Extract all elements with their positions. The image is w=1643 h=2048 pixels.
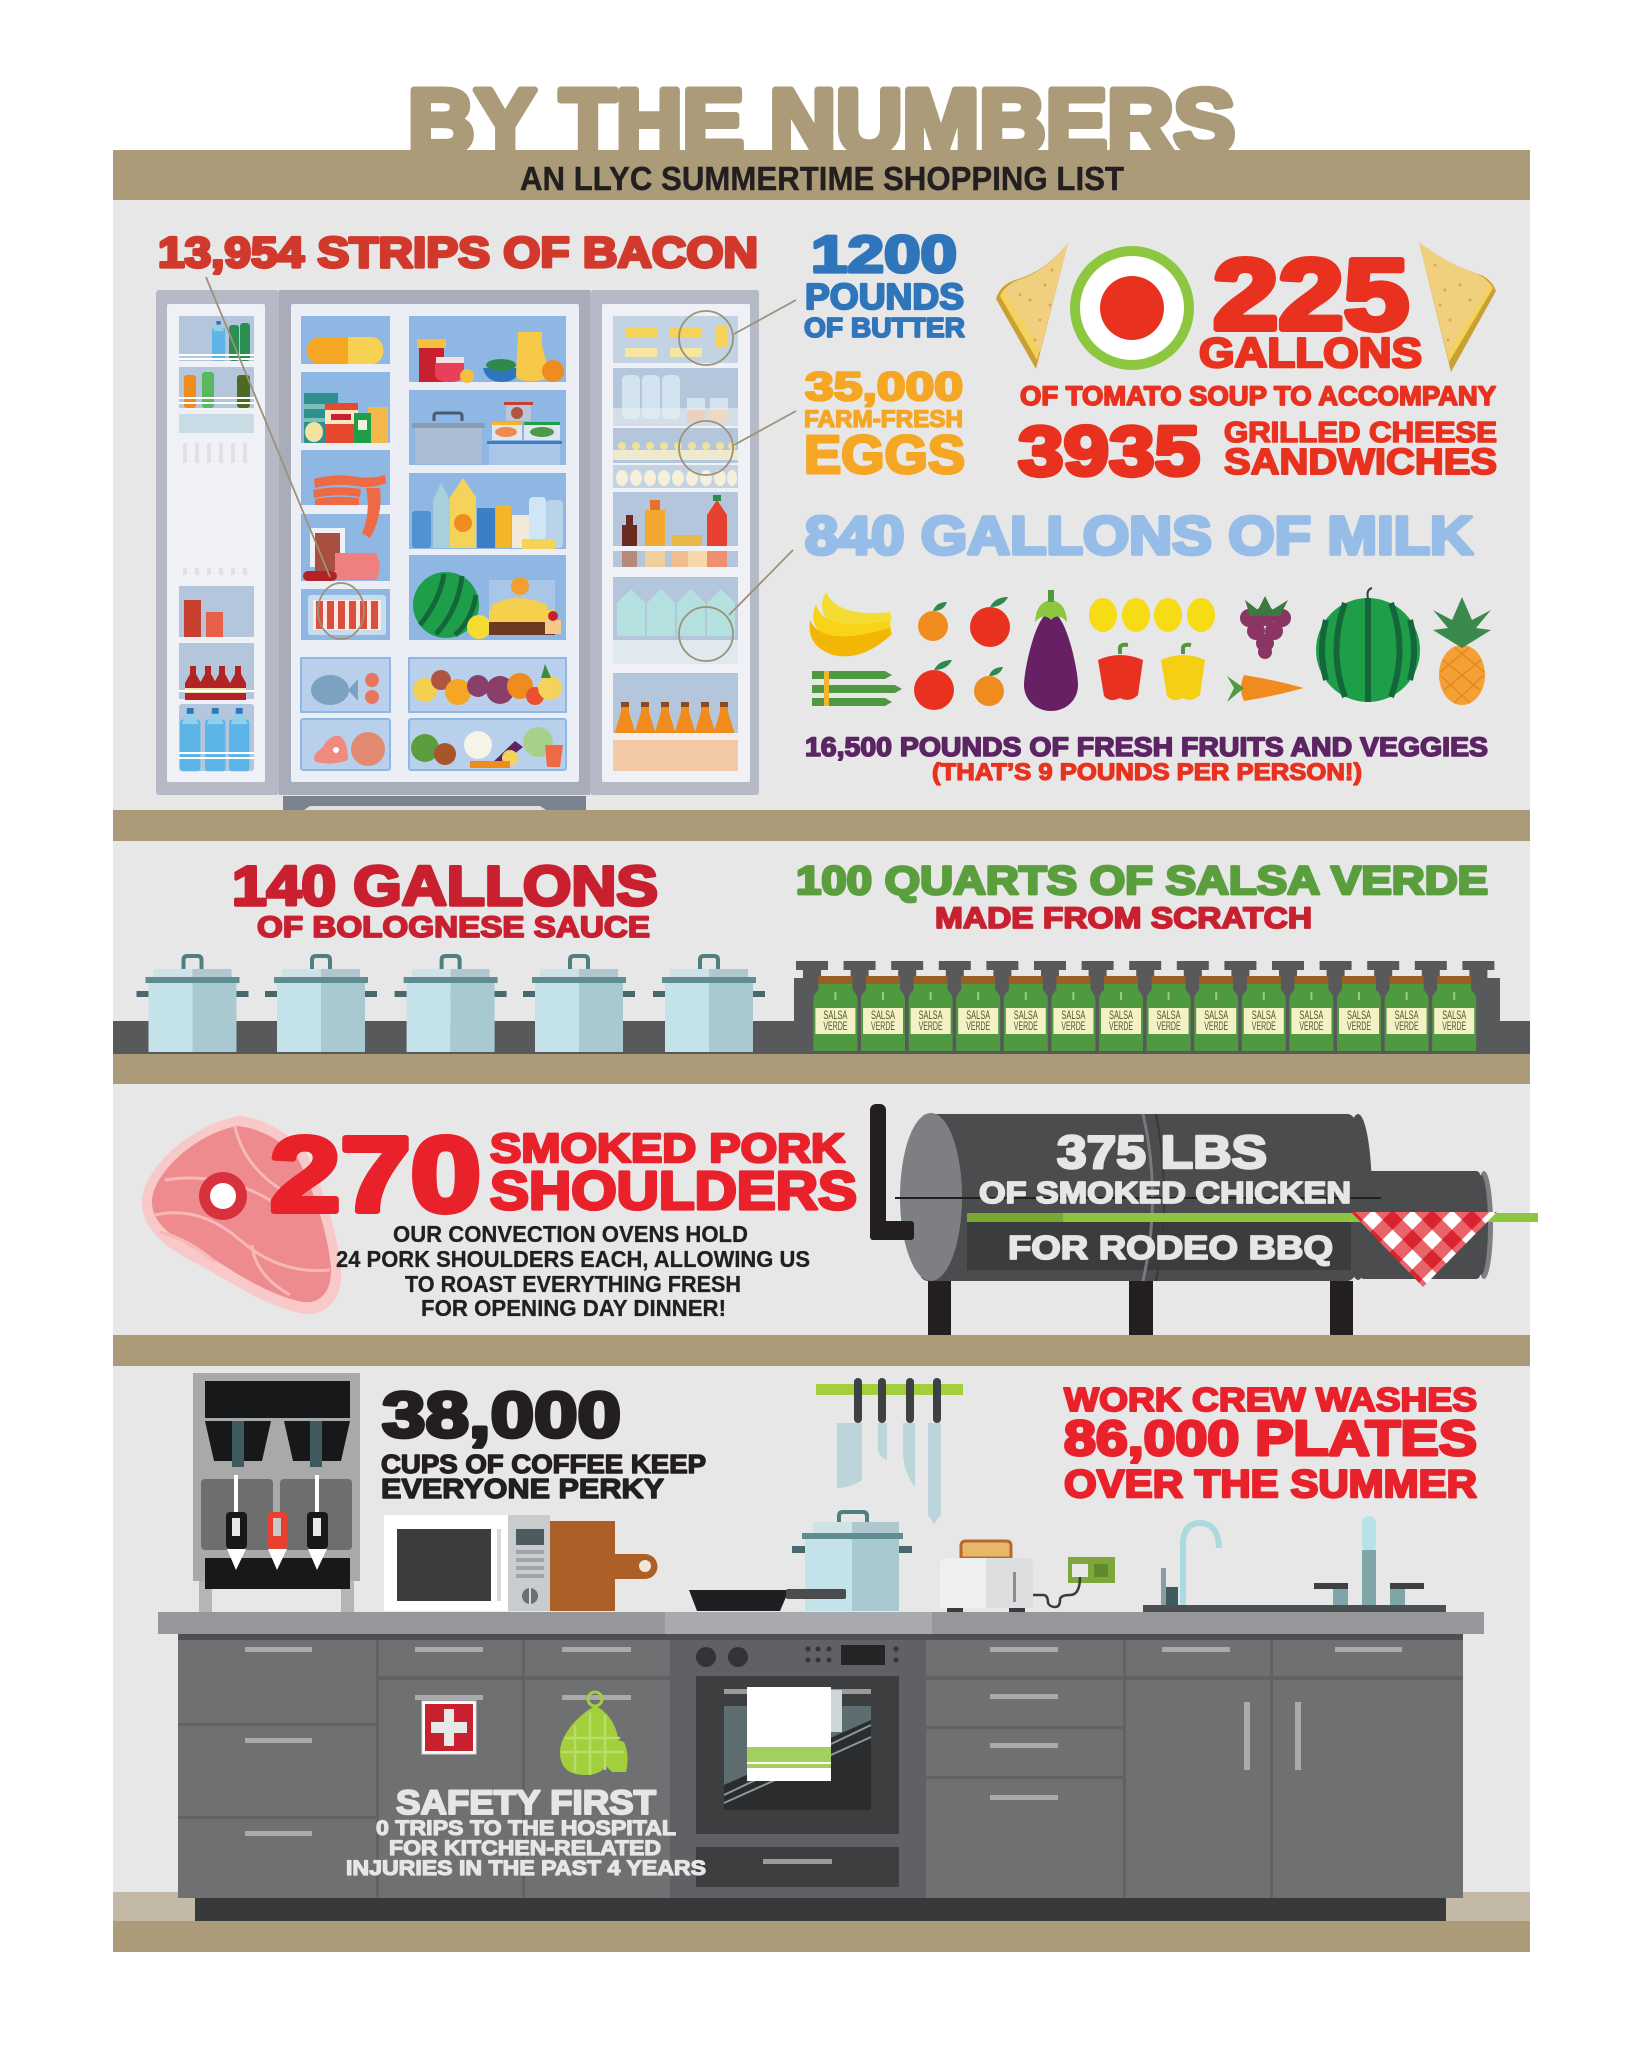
- bottle labels: VERDE: [823, 1019, 847, 1033]
- text block: butter: OF BUTTER: [804, 312, 965, 343]
- bottle labels: [823, 1008, 1466, 1033]
- bottle labels: VERDE: [966, 1019, 990, 1033]
- bottle labels: SALSA: [1252, 1008, 1276, 1022]
- text block: tomato soup and grilled cheese: 3935: [1018, 412, 1200, 490]
- text block: coffee: EVERYONE PERKY: [381, 1473, 664, 1504]
- bottle labels: SALSA: [1109, 1008, 1133, 1022]
- icon: grapes: [1240, 596, 1291, 659]
- text block: safety first: FOR KITCHEN-RELATED: [389, 1837, 661, 1860]
- fridge frame: [156, 290, 759, 810]
- fridge center left shelves: [301, 316, 390, 770]
- panel: gray wall backdrop: [113, 150, 1530, 1952]
- icon: frying pan: [689, 1589, 846, 1611]
- icon: sink and faucets: [1143, 1516, 1446, 1612]
- heading: bacon: 13,954 STRIPS OF BACON: [158, 229, 758, 277]
- bottle labels: SALSA: [919, 1008, 943, 1022]
- icon: tomato soup bowl: [1070, 246, 1194, 370]
- icon: microwave: [384, 1515, 550, 1611]
- fridge center right shelves: [409, 316, 566, 770]
- bottle labels: VERDE: [1061, 1019, 1085, 1033]
- bottle labels: SALSA: [1299, 1008, 1323, 1022]
- text block: eggs: [804, 365, 965, 485]
- fridge left door shelves: [179, 316, 254, 771]
- text block: bolognese: 140 GALLONS: [232, 854, 658, 917]
- smoker text: OF SMOKED CHICKEN: [979, 1175, 1351, 1210]
- icon: yellow pepper: [1161, 645, 1205, 700]
- text block: pork shoulders: OUR CONVECTION OVENS HOLD: [393, 1221, 748, 1247]
- icon: orange: [974, 667, 1004, 706]
- bottle labels: VERDE: [1442, 1019, 1466, 1033]
- fridge right door shelves: [613, 316, 738, 771]
- bottle labels: VERDE: [919, 1019, 943, 1033]
- shelf: dark rail: [113, 1021, 1530, 1054]
- text block: pork shoulders: FOR OPENING DAY DINNER!: [421, 1295, 726, 1321]
- salsa bottles backing: [794, 961, 1500, 1021]
- countertop: [158, 1612, 1484, 1634]
- text block: salsa verde: [796, 859, 1488, 935]
- icon: cutting board: [550, 1521, 658, 1611]
- icon: wall outlet and cord: [1033, 1557, 1115, 1607]
- icon: stock pot: [792, 1512, 912, 1611]
- text block: salsa verde: 100 QUARTS OF SALSA VERDE: [796, 859, 1488, 903]
- icon: right grilled cheese: [1419, 242, 1496, 372]
- text block: pork shoulders: SHOULDERS: [490, 1161, 857, 1221]
- icon: lemons: [1089, 598, 1215, 632]
- text block: bolognese: [232, 854, 658, 944]
- icon: eggplant: [1024, 590, 1078, 711]
- pots of bolognese: [136, 956, 765, 1052]
- icon: first aid: [422, 1701, 476, 1754]
- panel: refrigerator: [156, 277, 796, 810]
- bottle labels: VERDE: [1109, 1019, 1133, 1033]
- text block: butter: 1200: [811, 226, 957, 284]
- text block: tomato soup and grilled cheese: OF TOMATO SOUP TO ACCOMPANY: [1020, 381, 1496, 411]
- bottle labels: VERDE: [871, 1019, 895, 1033]
- text block: coffee: CUPS OF COFFEE KEEP: [381, 1449, 706, 1479]
- smoker handle: [870, 1104, 914, 1240]
- checkered towel: [1351, 1212, 1497, 1287]
- firebox: [1360, 1171, 1493, 1279]
- icon: pork shoulder: [142, 1116, 341, 1314]
- text block: safety first: [346, 1784, 706, 1880]
- smoker text: FOR RODEO BBQ: [1008, 1229, 1333, 1266]
- text block: tomato soup and grilled cheese: GALLONS: [1199, 329, 1422, 376]
- text block: plates: [1064, 1381, 1477, 1506]
- icon: toaster: [940, 1541, 1033, 1612]
- baseboard: [113, 1892, 1530, 1921]
- drum: [895, 1113, 1381, 1281]
- bottle labels: SALSA: [1442, 1008, 1466, 1022]
- leader lines and callout circles: [206, 277, 796, 661]
- bottle labels: VERDE: [1157, 1019, 1181, 1033]
- bottle labels: SALSA: [966, 1008, 990, 1022]
- smoker legs: [928, 1281, 1353, 1335]
- panel: shelf band 2: [113, 1053, 1530, 1084]
- text block: safety first: 0 TRIPS TO THE HOSPITAL: [376, 1817, 676, 1840]
- text block: coffee: 38,000: [382, 1379, 621, 1451]
- icon: coffee machine: [193, 1373, 360, 1612]
- icon: asparagus: [812, 671, 902, 706]
- bottle labels: VERDE: [1395, 1019, 1419, 1033]
- bottle labels: SALSA: [1157, 1008, 1181, 1022]
- text block: plates: OVER THE SUMMER: [1064, 1463, 1477, 1506]
- icon: pineapple: [1433, 597, 1491, 705]
- floor band: [113, 1921, 1530, 1952]
- icon: red pepper: [1098, 645, 1143, 700]
- oven controls: [696, 1645, 898, 1667]
- text block: tomato soup and grilled cheese: GRILLED CHEESE: [1224, 417, 1497, 449]
- smoker text: 375 LBS: [1057, 1126, 1267, 1178]
- bottle labels: SALSA: [1014, 1008, 1038, 1022]
- cabinet handles: [245, 1647, 1402, 1836]
- text block: tomato soup and grilled cheese: [1018, 239, 1497, 490]
- oven door: [696, 1676, 899, 1834]
- icon: knife rack: [816, 1378, 963, 1524]
- header band: [113, 150, 1530, 200]
- oven: [696, 1645, 899, 1887]
- text block: salsa verde: MADE FROM SCRATCH: [935, 902, 1312, 935]
- icon: watermelon: [1316, 588, 1420, 702]
- text block: pork shoulders: TO ROAST EVERYTHING FRESH: [405, 1271, 741, 1297]
- salsa verde bottles: [813, 976, 1476, 1051]
- bottle labels: VERDE: [1299, 1019, 1323, 1033]
- icon: orange: [918, 602, 948, 641]
- subtitle: AN LLYC SUMMERTIME SHOPPING LIST: [520, 160, 1124, 197]
- text block: pork shoulders: SMOKED PORK: [490, 1125, 845, 1171]
- bottle labels: SALSA: [1061, 1008, 1085, 1022]
- text block: pork shoulders: [270, 1116, 857, 1321]
- text block: fruits and veggies: 16,500 POUNDS OF FRESH FRUITS AND VEGGIES: [805, 732, 1488, 762]
- bottle labels: VERDE: [1204, 1019, 1228, 1033]
- text block: pork shoulders: 270: [270, 1116, 481, 1234]
- illustration: smoker: [870, 1104, 1538, 1335]
- bottle labels: SALSA: [823, 1008, 847, 1022]
- icon: carrot: [1227, 675, 1304, 702]
- text block: plates: 86,000 PLATES: [1064, 1412, 1477, 1466]
- text block: safety first: INJURIES IN THE PAST 4 YEARS: [346, 1857, 706, 1880]
- text block: eggs: 35,000: [805, 365, 963, 409]
- panel: base cabinets: [178, 1634, 1463, 1921]
- bottle labels: SALSA: [1204, 1008, 1228, 1022]
- panel: shelf band 1: [113, 810, 1530, 841]
- text block: butter: POUNDS: [805, 276, 964, 317]
- text block: fruits and veggies: [805, 732, 1488, 786]
- text block: plates: WORK CREW WASHES: [1064, 1381, 1477, 1418]
- icon: bananas: [809, 592, 892, 656]
- bottle labels: SALSA: [1395, 1008, 1419, 1022]
- text block: tomato soup and grilled cheese: 225: [1213, 239, 1409, 351]
- title: BY THE NUMBERS: [408, 72, 1235, 172]
- text block: coffee: [381, 1379, 706, 1504]
- text block: butter: [804, 226, 965, 343]
- text block: eggs: EGGS: [804, 425, 965, 485]
- bottle labels: VERDE: [1252, 1019, 1276, 1033]
- icon: left grilled cheese: [996, 243, 1068, 369]
- oven drawer: [696, 1847, 899, 1887]
- bottle labels: SALSA: [871, 1008, 895, 1022]
- text block: tomato soup and grilled cheese: SANDWICHES: [1224, 441, 1497, 482]
- text block: fruits and veggies: (THAT’S 9 POUNDS PER PERSON!): [932, 759, 1362, 786]
- text block: safety first: SAFETY FIRST: [396, 1784, 656, 1822]
- bottle labels: VERDE: [1014, 1019, 1038, 1033]
- dish towel: [747, 1687, 842, 1781]
- bottle labels: VERDE: [1347, 1019, 1371, 1033]
- text block: bolognese: OF BOLOGNESE SAUCE: [257, 911, 650, 944]
- text block: eggs: FARM-FRESH: [804, 406, 963, 433]
- text block: pork shoulders: 24 PORK SHOULDERS EACH, ALLOWING US: [336, 1246, 810, 1272]
- icons: fruits and vegetables: [809, 588, 1491, 711]
- heading: milk: 840 GALLONS OF MILK: [805, 506, 1473, 566]
- panel: shelf band 3: [113, 1335, 1530, 1366]
- skewer: [967, 1213, 1538, 1222]
- bottle labels: SALSA: [1347, 1008, 1371, 1022]
- icon: apple: [970, 597, 1010, 647]
- icon: apple: [914, 660, 954, 710]
- smoker text: [979, 1126, 1351, 1266]
- icon: oven mitt: [560, 1692, 628, 1775]
